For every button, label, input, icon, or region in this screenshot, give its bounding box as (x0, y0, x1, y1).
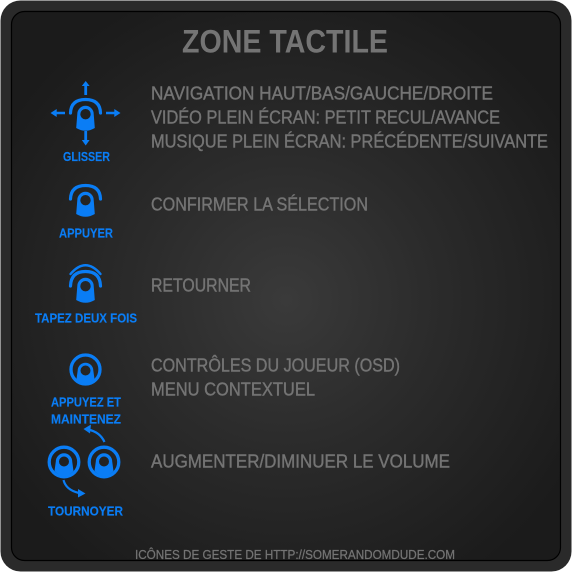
label: press and hold (51, 395, 121, 426)
label: double tap: TAPEZ DEUX FOIS (35, 312, 137, 326)
icon: press and hold gesture (71, 355, 100, 384)
description: tap: CONFIRMER LA SÉLECTION (151, 194, 368, 214)
description: press and hold (151, 354, 400, 399)
description: swipe: VIDÉO PLEIN ÉCRAN: PETIT RECUL/AVANCE (151, 107, 500, 127)
icon: tap gesture (70, 186, 100, 217)
label: swipe: GLISSER (63, 150, 110, 164)
label: rotate: TOURNOYER (48, 504, 123, 518)
footer credit: ICÔNES DE GESTE DE HTTP://SOMERANDOMDUDE.COM (135, 547, 455, 562)
description: swipe: NAVIGATION HAUT/BAS/GAUCHE/DROITE (151, 83, 493, 103)
description: double tap: RETOURNER (151, 276, 251, 296)
icon: double tap gesture (70, 265, 100, 303)
label: tap: APPUYER (59, 226, 113, 240)
label: press and hold: MAINTENEZ (51, 412, 121, 426)
description: rotate: AUGMENTER/DIMINUER LE VOLUME (151, 452, 450, 472)
description: press and hold: CONTRÔLES DU JOUEUR (OSD) (151, 354, 400, 376)
label: press and hold: APPUYEZ ET (51, 395, 121, 409)
description: press and hold: MENU CONTEXTUEL (151, 379, 315, 399)
description: swipe (151, 83, 548, 151)
icon: swipe gesture (50, 81, 120, 146)
icon: rotate gesture (49, 424, 119, 498)
title: ZONE TACTILE (182, 24, 388, 60)
